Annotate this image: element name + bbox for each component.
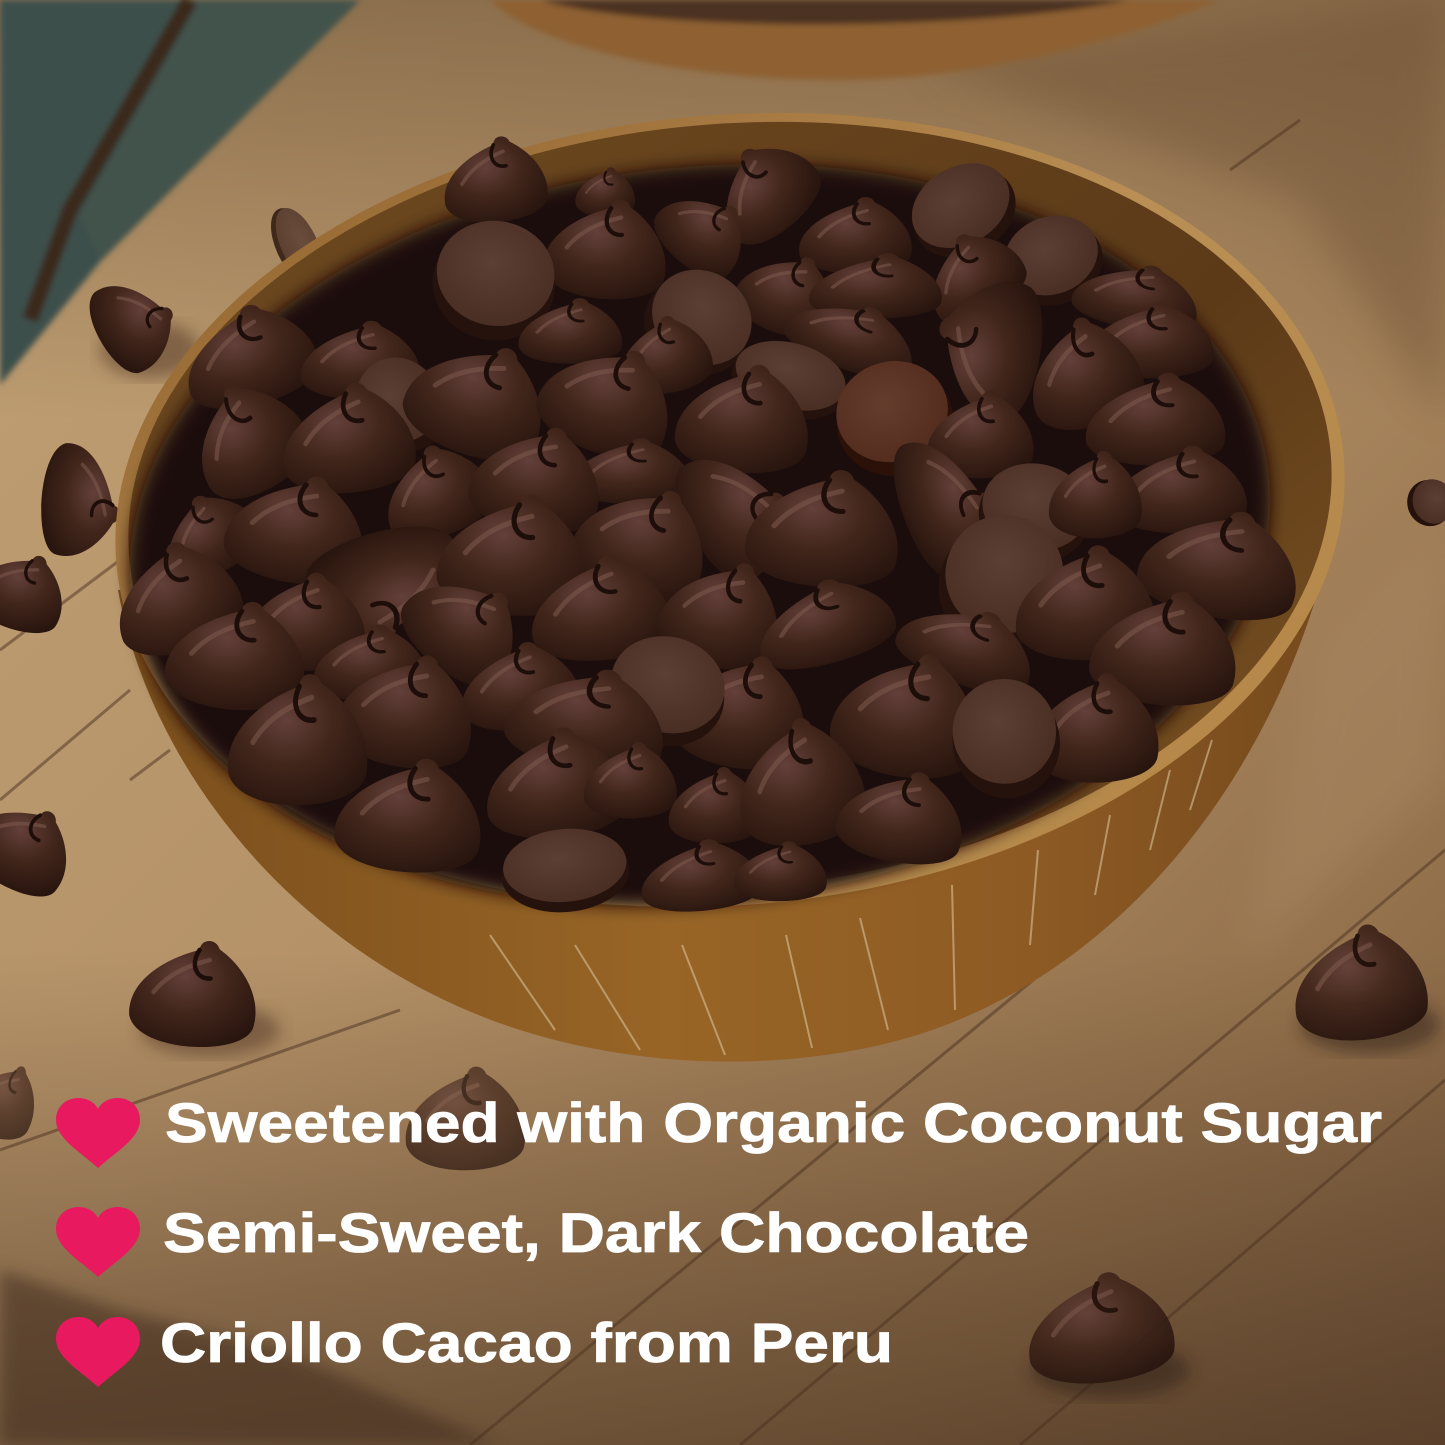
- feature: semi-sweet dark chocolate: Semi-Sweet, Dark Chocolate: [163, 1201, 1029, 1264]
- feature list: [56, 1091, 1382, 1387]
- feature: sweetened with organic coconut sugar: [56, 1091, 1382, 1168]
- feature: criollo cacao from peru: Criollo Cacao from Peru: [160, 1311, 893, 1374]
- feature: sweetened with organic coconut sugar: Sweetened with Organic Coconut Sugar: [165, 1091, 1382, 1154]
- feature: semi-sweet dark chocolate: [56, 1201, 1029, 1277]
- teal painted planks, top left corner: [0, 0, 360, 385]
- second bowl in background: [490, 0, 1220, 80]
- chocolate chips in the bowl: [102, 123, 1308, 918]
- feature: criollo cacao from peru: [56, 1311, 893, 1387]
- wooden bowl: [82, 63, 1378, 1062]
